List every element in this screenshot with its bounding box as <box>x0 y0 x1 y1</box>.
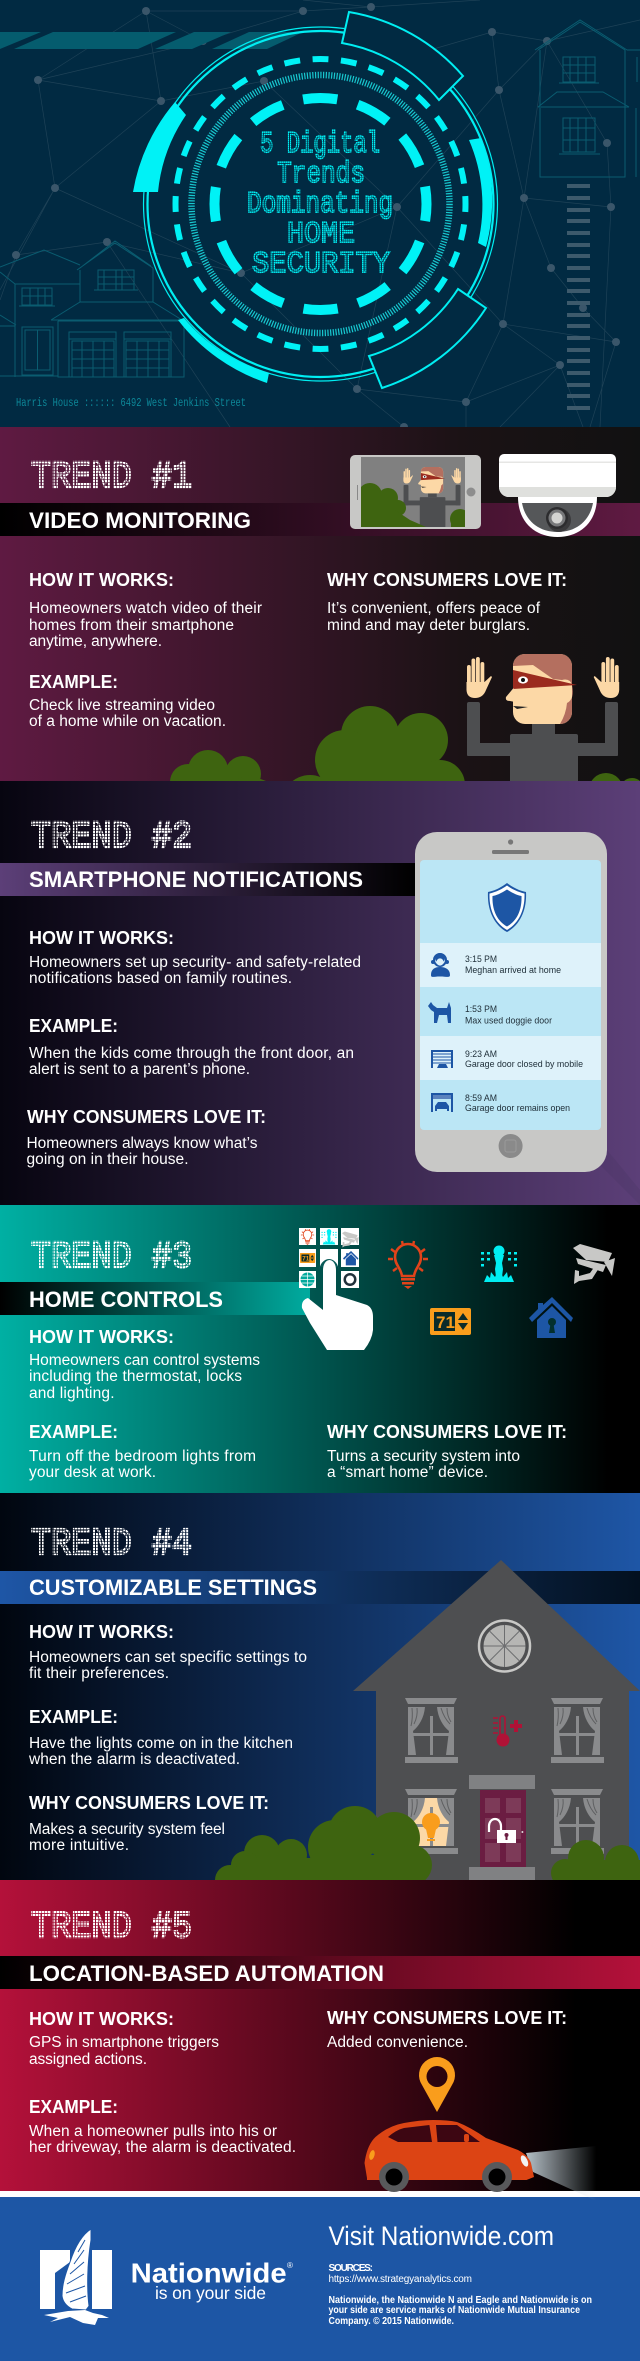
title: 5 Digital <box>260 127 380 162</box>
window: upper right <box>551 1698 604 1763</box>
icon: house with keyhole <box>529 1297 573 1338</box>
window: upper left <box>405 1698 458 1763</box>
text: example: Check live streaming video <box>29 697 215 714</box>
text: example: your desk at work. <box>29 1464 156 1481</box>
icon: landscape phone with video feed <box>350 455 481 529</box>
logo wordmark: Nationwide <box>131 2258 287 2288</box>
illustration: smartphone <box>415 832 640 1205</box>
text: example: her driveway, the alarm is deactivated. <box>29 2139 296 2156</box>
notification: Max: Max used doggie door <box>465 1016 552 1026</box>
text: how it works: Homeowners can control systems <box>29 1352 260 1369</box>
text: how it works: and lighting. <box>29 1385 114 1402</box>
text: how it works: Homeowners set up security- and safety-related <box>29 954 361 971</box>
band: video monitoring <box>0 503 640 536</box>
text: example: When a homeowner pulls into his or <box>29 2123 277 2140</box>
text: example: alert is sent to a parent’s phone. <box>29 1061 250 1078</box>
notification: garage closed <box>420 1036 601 1080</box>
door <box>469 1775 535 1880</box>
text: why consumers love it <box>327 2008 567 2051</box>
logo wordmark <box>131 2258 293 2303</box>
heading: trend 3: TREND #3 <box>31 1236 192 1279</box>
title: SECURITY <box>252 247 390 282</box>
text: why consumers love it <box>327 570 567 634</box>
text: example: EXAMPLE: <box>29 1422 118 1442</box>
notification: Meghan <box>420 943 601 987</box>
heading: trend 5: TREND #5 <box>31 1906 192 1949</box>
band: smartphone notifications: SMARTPHONE NOTIFICATIONS <box>29 867 363 892</box>
text: example <box>29 1422 256 1481</box>
address line: Harris House :::::: 6492 West Jenkins Street <box>16 397 246 410</box>
round attic window <box>479 1620 530 1672</box>
logo: Nationwide N and eagle <box>40 2229 112 2325</box>
text: why consumers love it: WHY CONSUMERS LOVE IT: <box>29 1793 269 1813</box>
icon: map pin <box>419 2057 455 2112</box>
text: how it works: Homeowners can set specific settings to <box>29 1649 307 1666</box>
text: sources <box>328 2263 472 2285</box>
text: how it works: homes from their smartphone <box>29 617 234 634</box>
illustration: house <box>353 1560 640 1880</box>
circular HUD <box>133 12 498 388</box>
decorative stripes <box>0 32 303 49</box>
text: example: EXAMPLE: <box>29 672 118 692</box>
text: how it works: including the thermostat, locks <box>29 1368 242 1385</box>
text: example: of a home while on vacation. <box>29 713 226 730</box>
text: why consumers love it: Homeowners always know what’s <box>26 1135 258 1152</box>
title: HOME <box>287 217 355 252</box>
title: Trends <box>277 157 365 192</box>
text: example <box>29 1710 292 1764</box>
window: lower right <box>551 1789 604 1854</box>
icon: sprinkler <box>481 1246 517 1282</box>
text: how it works <box>29 1327 260 1402</box>
network background <box>0 0 640 431</box>
text: why consumers love it: going on in their house. <box>26 1151 188 1168</box>
band: customizable settings <box>0 1571 640 1604</box>
text: example: When the kids come through the front door, an <box>29 1045 354 1062</box>
icon grid: small app tiles <box>299 1228 359 1288</box>
logo wordmark: ® <box>287 2261 293 2270</box>
title <box>247 127 393 282</box>
text: why consumers love it: mind and may deter burglars. <box>327 617 530 634</box>
text: example: EXAMPLE: <box>29 1707 118 1727</box>
text: how it works: fit their preferences. <box>29 1665 169 1682</box>
text: how it works <box>29 570 262 650</box>
text: how it works: HOW IT WORKS: <box>29 928 174 948</box>
house outline: left <box>0 241 184 377</box>
text: example <box>29 2097 296 2156</box>
text: how it works: HOW IT WORKS: <box>29 570 174 590</box>
text: example: Have the lights come on in the kitchen <box>29 1735 293 1752</box>
text: why consumers love it: a “smart home” device. <box>327 1464 488 1481</box>
text: how it works: HOW IT WORKS: <box>29 2009 174 2029</box>
notification: garage open: 8:59 AM <box>465 1093 497 1104</box>
notification: Max <box>428 1002 552 1026</box>
text: example <box>30 675 225 726</box>
text: why consumers love it: WHY CONSUMERS LOVE IT: <box>327 570 567 590</box>
icon: shield <box>488 883 526 932</box>
notification: garage open: Garage door remains open <box>465 1103 570 1114</box>
text: why consumers love it: It’s convenient, offers peace of <box>327 600 541 617</box>
icon: pointing hand <box>302 1260 373 1350</box>
heading: trend 1: TREND #1 <box>31 456 192 499</box>
text: how it works: notifications based on family routines. <box>29 970 292 987</box>
footer band <box>0 2191 640 2361</box>
ladder stripes <box>567 184 590 410</box>
text: legal <box>328 2295 592 2327</box>
band: customizable settings: CUSTOMIZABLE SETTINGS <box>29 1575 317 1600</box>
panel: trend 4 <box>0 1493 640 1895</box>
logo wordmark: is on your side <box>155 2283 266 2303</box>
icon: light bulb <box>388 1241 428 1289</box>
text: how it works: Homeowners watch video of their <box>29 600 262 617</box>
text: sources: https://www.strategyanalytics.com <box>328 2274 472 2285</box>
icon: dome security camera <box>499 454 616 537</box>
text: why consumers love it <box>327 1422 567 1481</box>
text: example: when the alarm is deactivated. <box>28 1751 240 1768</box>
band: location-based automation: LOCATION-BASED AUTOMATION <box>29 1961 384 1986</box>
text: how it works: GPS in smartphone triggers <box>29 2034 219 2051</box>
text: legal: your side are service marks of Nationwide Mutual Insurance <box>328 2305 580 2316</box>
text: why consumers love it: WHY CONSUMERS LOVE IT: <box>327 2008 567 2028</box>
illustration: bushes <box>215 1806 640 1880</box>
notification: Max: 1:53 PM <box>465 1004 497 1015</box>
text: how it works: assigned actions. <box>29 2051 147 2068</box>
text: why consumers love it <box>26 1107 266 1168</box>
text: why consumers love it: WHY CONSUMERS LOVE IT: <box>327 1422 567 1442</box>
band: location-based automation <box>0 1956 640 1989</box>
illustration: car with headlight <box>364 2120 612 2208</box>
text: sources: SOURCES: <box>328 2263 373 2274</box>
notification: Meghan: Meghan arrived at home <box>465 965 561 976</box>
icon: thermometer plus <box>493 1716 522 1746</box>
icon: thermostat <box>430 1308 471 1335</box>
text: why consumers love it: Makes a security system feel <box>29 1821 225 1838</box>
text: visit: Visit Nationwide.com <box>328 2221 554 2251</box>
text: how it works: anytime, anywhere. <box>29 633 162 650</box>
notification: Meghan: 3:15 PM <box>465 954 497 965</box>
text: why consumers love it <box>29 1796 268 1850</box>
panel: trend 2 <box>0 781 640 1205</box>
panel: trend 3 <box>0 1205 640 1493</box>
panel: hero header <box>0 0 640 431</box>
notification: garage open <box>431 1093 570 1114</box>
text: how it works <box>29 2009 219 2068</box>
text: example: EXAMPLE: <box>29 1016 118 1036</box>
notification: garage closed: 9:23 AM <box>465 1049 497 1060</box>
text: example <box>29 1016 354 1078</box>
text: how it works: HOW IT WORKS: <box>29 1327 174 1347</box>
band: smartphone notifications <box>0 863 416 896</box>
text: why consumers love it: WHY CONSUMERS LOVE IT: <box>27 1107 266 1127</box>
icon: CCTV camera <box>573 1244 615 1284</box>
text: example: EXAMPLE: <box>29 2097 118 2117</box>
title: Dominating <box>247 187 393 222</box>
illustration: bushes <box>170 706 640 781</box>
text: why consumers love it: Added convenience. <box>327 2034 468 2051</box>
house outline: right <box>535 20 640 177</box>
text: example: Turn off the bedroom lights from <box>29 1448 256 1465</box>
heading: trend 2: TREND #2 <box>31 816 192 859</box>
text: how it works <box>29 928 361 987</box>
heading: trend 4: TREND #4 <box>31 1523 192 1566</box>
band: home controls: HOME CONTROLS <box>29 1287 223 1312</box>
text: why consumers love it: Turns a security system into <box>327 1448 520 1465</box>
notification: garage closed: Garage door closed by mobile <box>465 1059 583 1070</box>
text: legal: Company. © 2015 Nationwide. <box>328 2316 454 2327</box>
text: how it works <box>29 1622 307 1682</box>
panel: trend 5 <box>0 1880 640 2208</box>
window: lower left lit <box>405 1789 458 1854</box>
text: legal: Nationwide, the Nationwide N and Eagle and Nationwide is on <box>328 2295 592 2306</box>
band: home controls <box>0 1282 310 1315</box>
text: why consumers love it: more intuitive. <box>29 1837 129 1854</box>
band: video monitoring: VIDEO MONITORING <box>29 508 251 533</box>
text: how it works: HOW IT WORKS: <box>29 1622 174 1642</box>
illustration: burglar with hands raised <box>466 654 620 781</box>
panel: trend 1 <box>0 427 640 781</box>
